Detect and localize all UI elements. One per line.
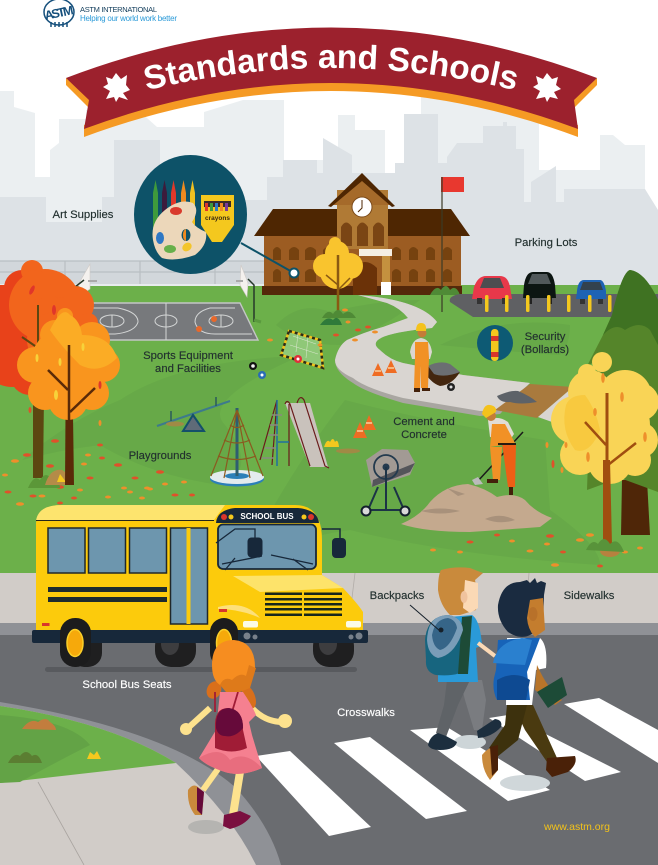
front wheels [60,618,238,667]
soccer balls [249,362,266,379]
seesaw [157,397,230,431]
ASTM logo [43,0,177,27]
label: playgrounds: Playgrounds [129,450,192,462]
label: security: Security [525,331,565,343]
leaves left [2,407,195,506]
parking lot [450,272,658,317]
label: sports equipment: Sports Equipment [143,350,233,362]
label: backpacks [370,590,444,632]
school building [254,173,470,295]
front orange tree [17,308,120,485]
art supplies callout [134,155,298,278]
paint palette [152,202,206,259]
red car [472,276,512,304]
worker with shovel [472,405,523,495]
right yellow tree [551,352,658,552]
bus hood [42,575,361,628]
label: sports equipment: and Facilities [155,363,221,375]
label: parking lots: Parking Lots [515,237,578,249]
skyline background [0,91,658,290]
crayon box: crayons [205,215,230,222]
banner orange underside [66,78,597,137]
leaves right [430,437,643,568]
label: backpacks: Backpacks [370,590,425,602]
girl walking [180,640,292,834]
slide and ladder [260,398,329,468]
school tower [328,173,395,249]
label: school bus seats: School Bus Seats [82,679,172,691]
evergreen tree [585,270,658,535]
bumper [32,630,368,643]
black car [523,272,556,304]
school bus [32,505,368,672]
bus side stripes [48,587,167,602]
bus windows [48,528,208,624]
label: security: (Bollards) [521,344,569,356]
crosswalk stripes [256,698,658,836]
leaves by path [267,308,378,346]
ASTM logo: ASTM INTERNATIONAL [80,5,157,14]
school entrance [353,249,392,295]
back orange tree [0,260,98,478]
boy with teal backpack [425,567,501,750]
basketball hoop right [236,265,261,322]
label: cement: Cement and [393,416,455,428]
windshield [216,524,316,570]
blue car [576,280,606,304]
bollards row [485,295,654,312]
soccer goal [281,331,323,368]
boy with blue backpack [482,578,576,791]
label: sidewalks: Sidewalks [564,590,615,602]
grass lawn [0,284,658,573]
side mirror [322,529,346,558]
rear wheels [70,625,354,667]
sidewalk [0,573,658,623]
website url: www.astm.org [543,821,610,833]
label: crosswalks: Crosswalks [337,707,395,719]
maple leaf left [103,73,130,102]
rope climbing dome [210,408,264,486]
pencils [153,180,195,235]
destination sign [216,508,319,523]
road [0,635,658,865]
curb [0,623,658,635]
maple leaf right [533,73,561,102]
security bollard icon [477,325,513,361]
grass tuft left [28,470,70,488]
yellow tree by school [313,237,363,318]
basketball hoop left [75,264,97,293]
fence [0,261,265,285]
logo emblem: ASTM [43,3,75,23]
ASTM logo: Helping our world work better [80,14,177,23]
title: Standards and Schools [144,44,517,89]
label: cement: Concrete [401,429,447,441]
worker with wheelbarrow [410,323,460,392]
small grass tufts and flowers [320,318,360,454]
sand pile [401,484,552,532]
crayon box [201,195,234,242]
traffic cones [353,360,397,438]
flagpole and flag [430,177,464,312]
basketball court [85,303,258,340]
destination sign: SCHOOL BUS [240,512,294,521]
banner [66,28,597,137]
label: art supplies: Art Supplies [53,209,114,221]
corner sidewalk and grass [0,702,281,865]
bus body [36,505,363,630]
winding concrete path [335,295,585,422]
cement mixer [362,449,415,516]
